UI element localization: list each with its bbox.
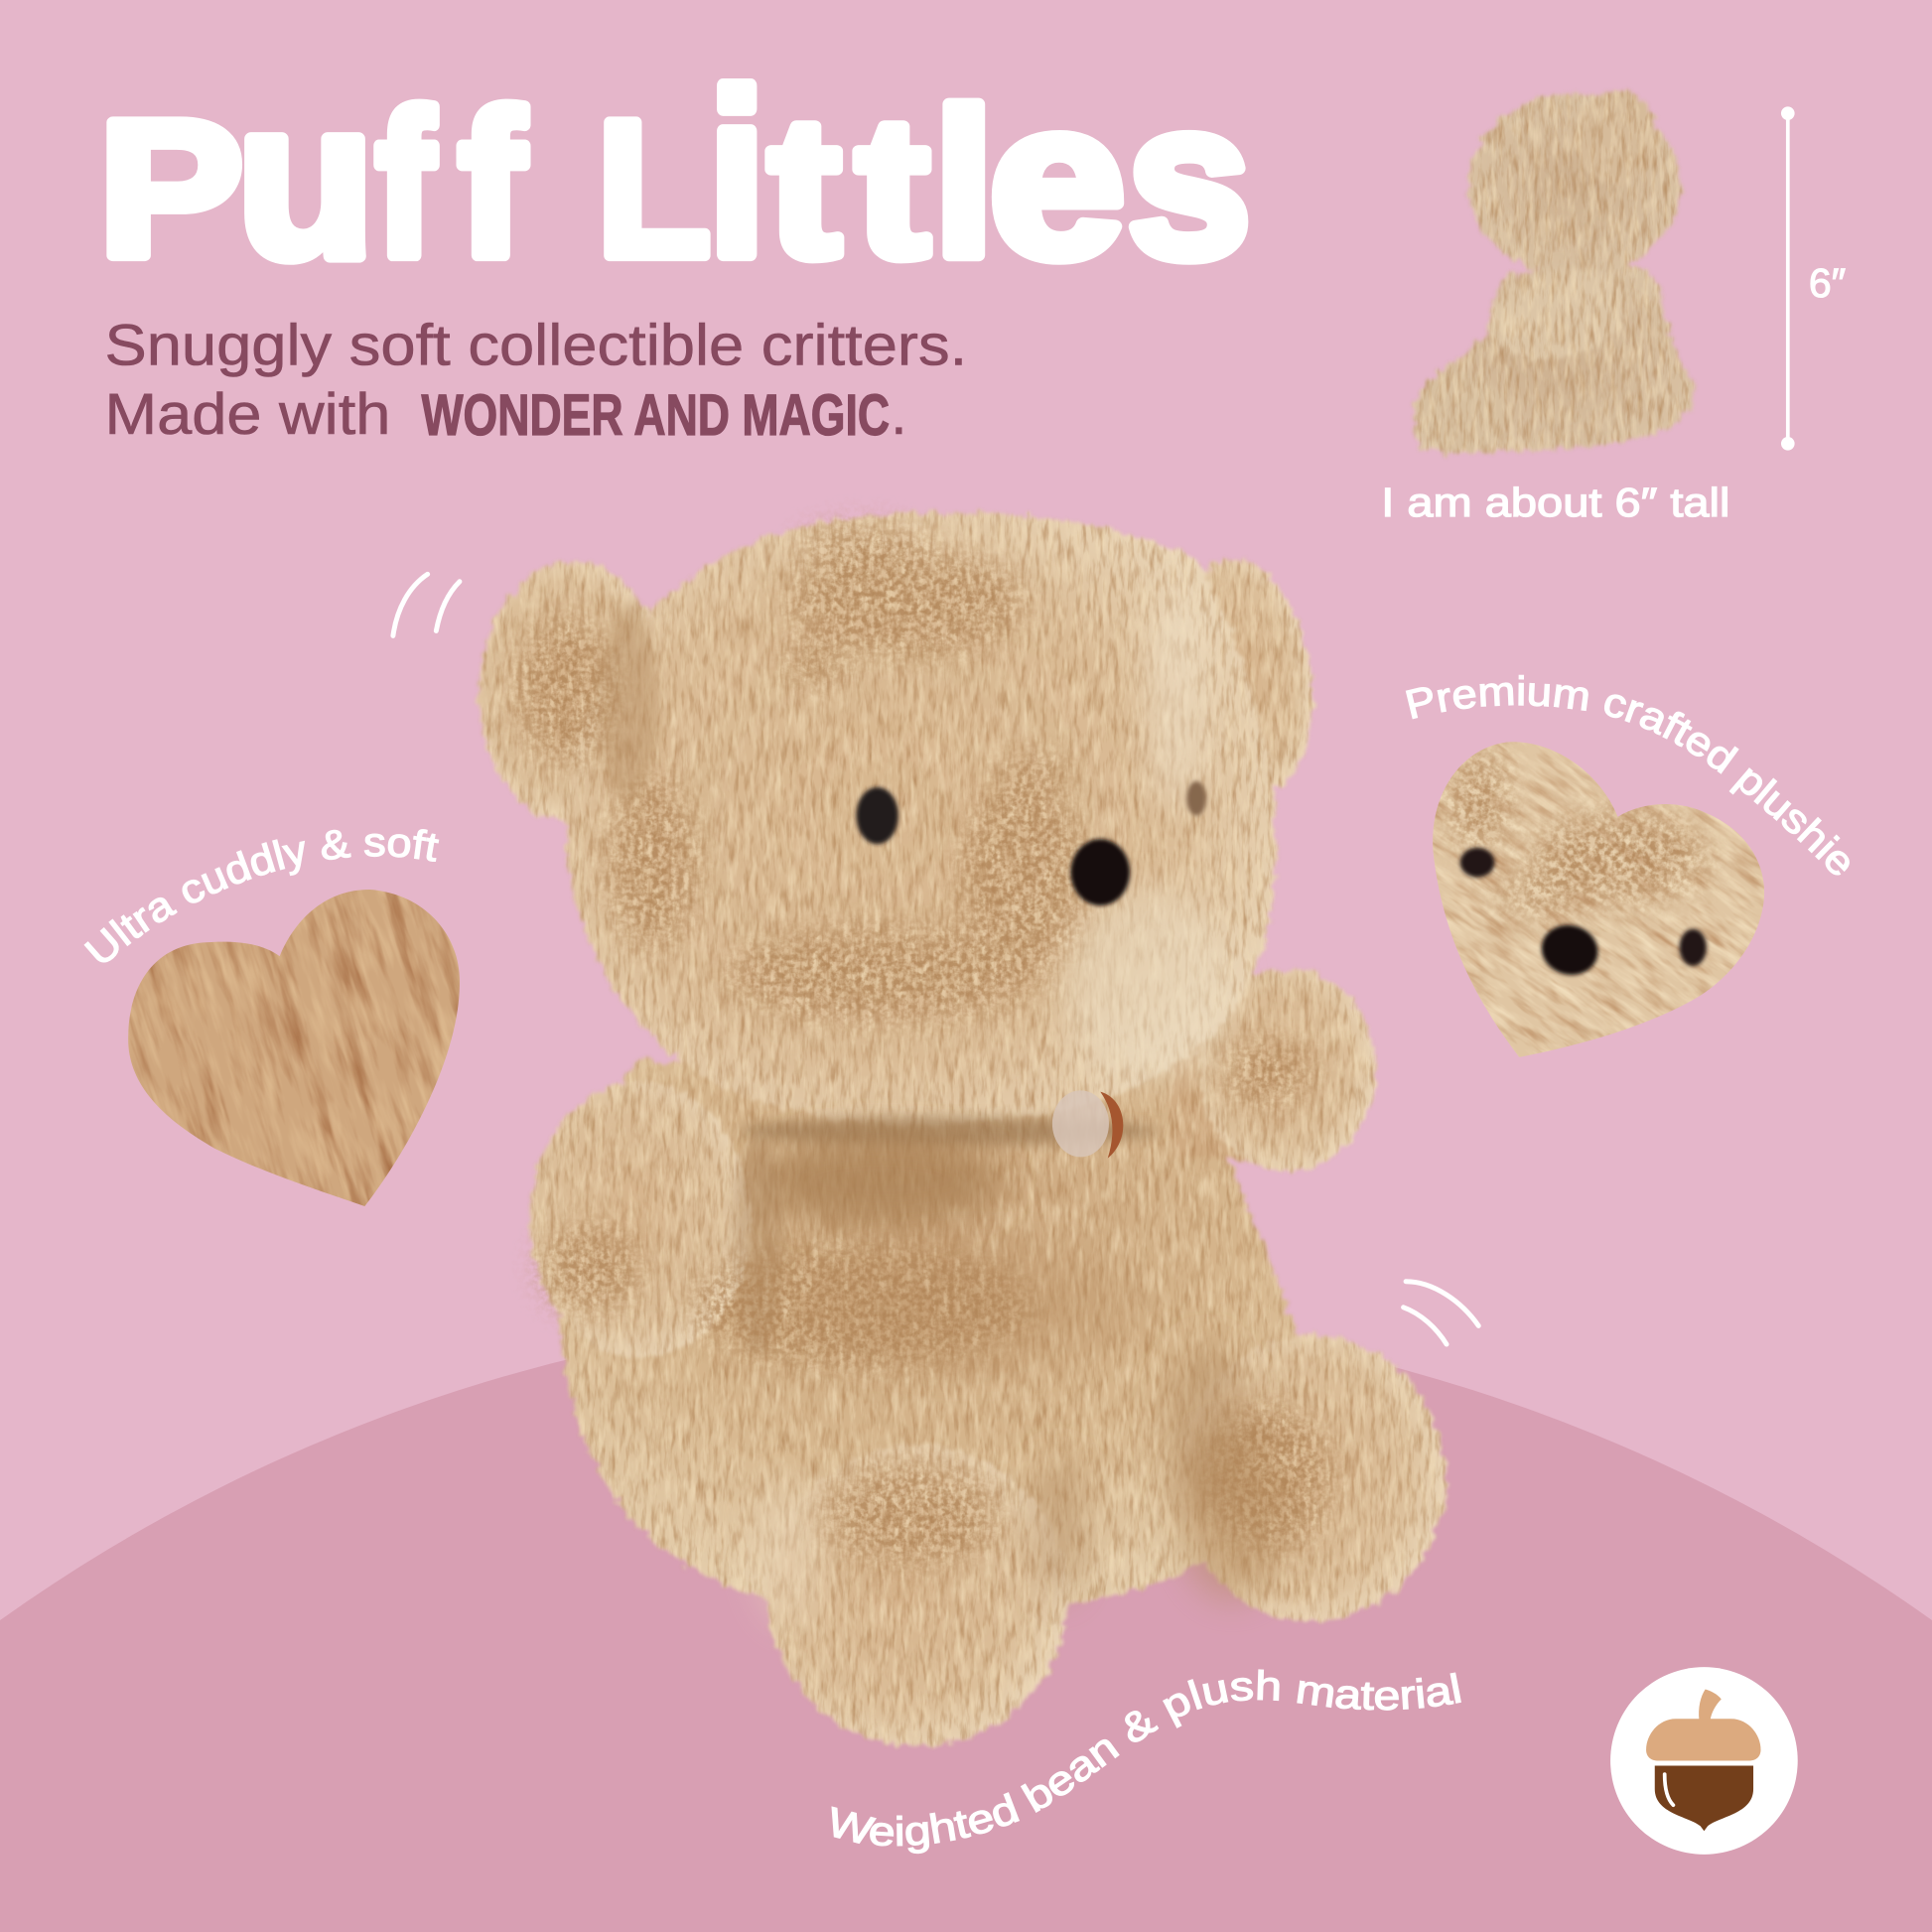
title: L [597, 80, 711, 297]
title: t [856, 75, 929, 298]
height caption: I am about 6″ tall [1381, 480, 1729, 525]
acorn highlight [1665, 1774, 1673, 1805]
bear eyes and nose [857, 781, 1206, 905]
title [98, 44, 1251, 304]
mottled fur patches [517, 528, 1330, 1565]
subtitle: Snuggly soft collectible critters. [104, 313, 967, 377]
height scale: 6″ [1809, 260, 1846, 306]
main bear [480, 512, 1446, 1746]
small side-view bear [1414, 91, 1695, 453]
label: ultra cuddly: Ultra cuddly & soft [83, 829, 439, 963]
subtitle: Made with [104, 382, 390, 447]
icon: acorn badge [1610, 1667, 1798, 1855]
heart eyes and nose [1460, 848, 1707, 981]
bear body and limbs [480, 512, 1446, 1746]
title: f [376, 68, 435, 299]
acorn stem [1699, 1690, 1722, 1721]
title: s [1128, 57, 1251, 304]
subtitle: WONDER AND MAGIC [421, 383, 890, 448]
title: P [98, 80, 243, 297]
title: i [709, 44, 765, 304]
heart fur patches [1448, 752, 1707, 910]
heart: face closeup [1433, 742, 1764, 1057]
fur shading [599, 592, 1288, 1626]
motion lines: ear [393, 574, 460, 635]
label: weighted bean: Weighted bean & plush material [832, 1669, 1461, 1855]
subtitle [104, 313, 967, 448]
heart: fur closeup [128, 890, 460, 1206]
title: e [990, 55, 1125, 303]
acorn nut [1655, 1765, 1753, 1831]
title: l [934, 68, 994, 300]
title: f [459, 69, 525, 300]
label: premium crafted: Premium crafted plushie [1406, 675, 1850, 876]
height scale [1781, 106, 1846, 451]
collar charm [1052, 1090, 1123, 1159]
acorn cap [1646, 1719, 1760, 1760]
motion lines: foot [1404, 1282, 1478, 1344]
title: t [768, 77, 841, 299]
title: u [237, 56, 374, 304]
subtitle: . [891, 382, 907, 447]
ground arc [0, 1311, 1932, 1932]
